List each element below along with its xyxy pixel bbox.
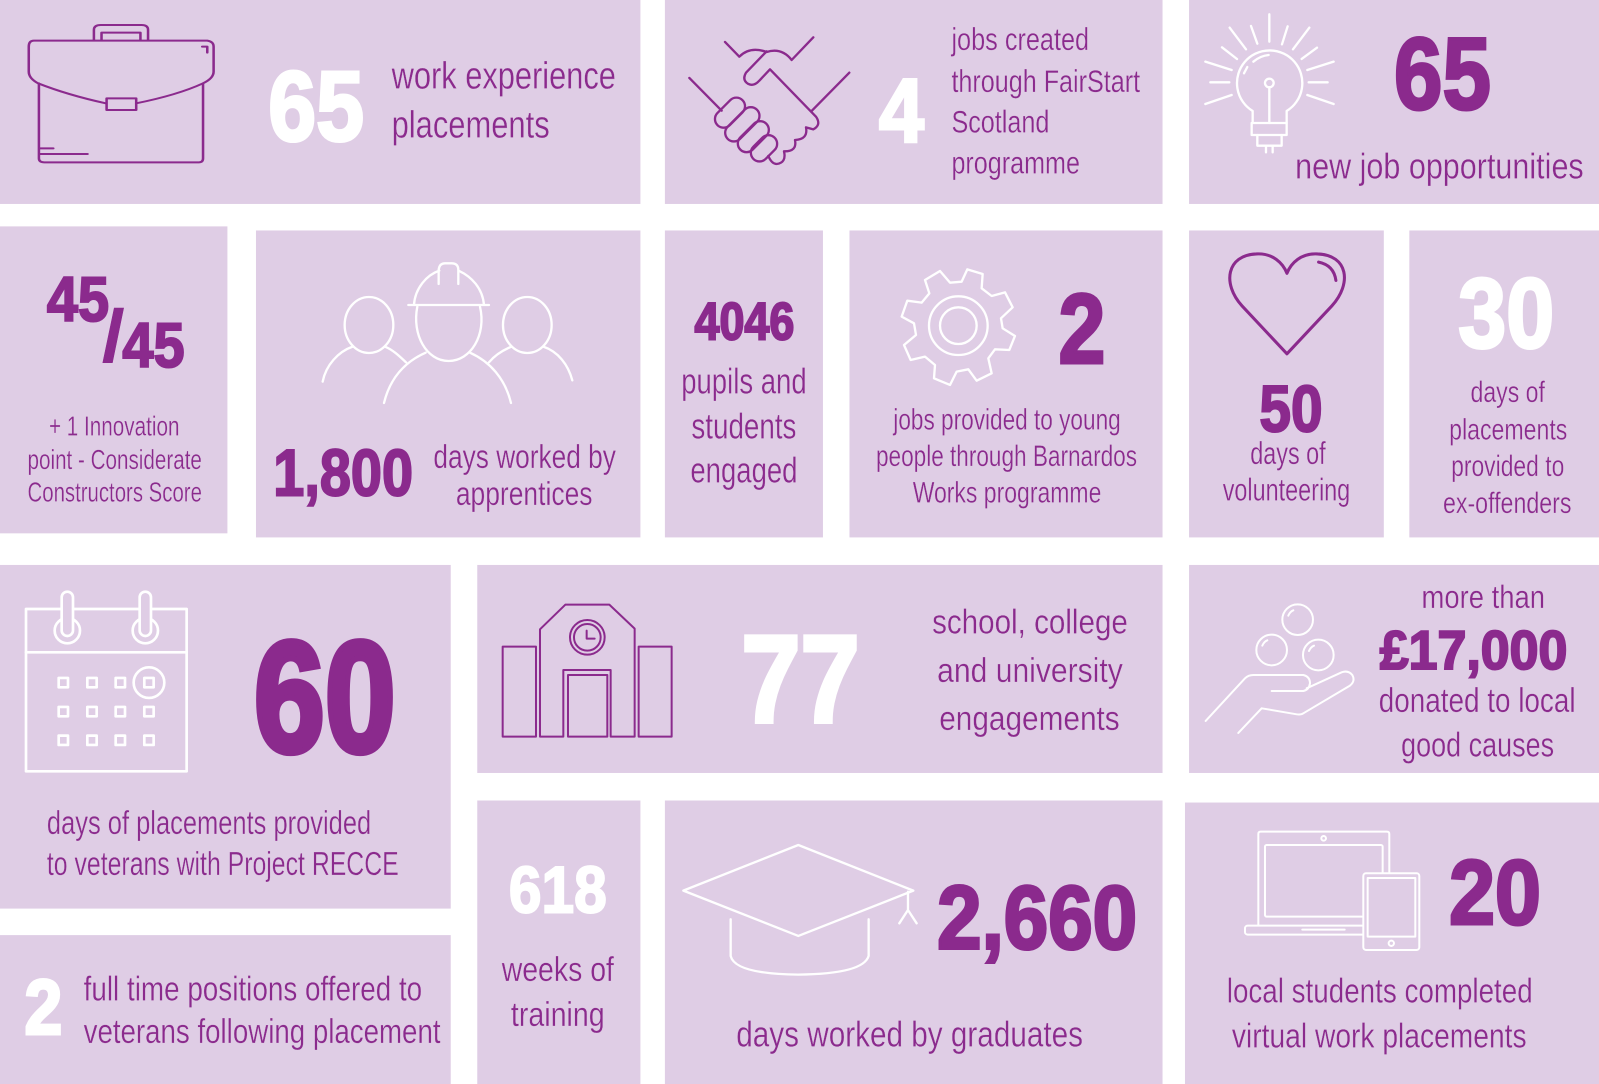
stat: 65: 65 — [1394, 17, 1491, 131]
panel: days of volunteering — [1189, 230, 1384, 537]
panel: days worked by apprentices — [256, 230, 640, 537]
label: work experience placements: work experience — [391, 55, 616, 97]
label: days of volunteering: volunteering — [1223, 472, 1350, 508]
label: full time positions offered to veterans — [84, 970, 441, 1051]
label: jobs created through FairStart Scotland programme: programme — [951, 144, 1080, 180]
label: jobs provided to young people: jobs provided to young — [893, 403, 1121, 436]
label: days worked by apprentices — [433, 439, 616, 513]
label: school, college and university engagements: and university — [937, 652, 1123, 690]
label: innovation point: Constructors Score — [28, 477, 202, 508]
stat: 50: 50 — [1259, 372, 1323, 446]
stat: 618: 618 — [509, 854, 607, 928]
label: innovation point: point - Considerate — [28, 444, 202, 475]
label: jobs created through FairStart Scotland programme: through FairStart — [951, 63, 1140, 99]
label: donated to local good causes: good causes — [1401, 727, 1554, 765]
label: jobs provided to young people — [876, 403, 1137, 510]
stat: 4046: 4046 — [694, 293, 794, 352]
stat: 45/45 — [47, 265, 185, 381]
label: days of placements provided to veterans: to veterans with Project RECCE — [47, 846, 399, 883]
stat: 4: 4 — [879, 62, 924, 162]
label: local students completed virtual work placements — [1227, 972, 1533, 1055]
label: days worked by graduates: days worked by graduates — [736, 1014, 1083, 1054]
panel: full time positions — [0, 935, 451, 1084]
label: local students completed virtual work placements: local students completed — [1227, 972, 1533, 1010]
stat: 2: 2 — [1059, 273, 1105, 384]
label: pupils and students engaged — [681, 362, 807, 490]
stat: 45/45: / — [102, 295, 124, 377]
label: innovation point: + 1 Innovation — [49, 410, 179, 441]
stat: 45/45: 45 — [47, 265, 109, 335]
label: days of placements provided to ex-offenders: days of — [1471, 376, 1546, 409]
icon: graduation cap — [683, 845, 917, 975]
panel: work experience placements — [0, 0, 640, 204]
label: days worked by apprentices: days worked by — [433, 439, 616, 476]
panel: new job opportunities — [1189, 0, 1599, 204]
panel: days worked by graduates — [665, 801, 1163, 1084]
label: more than: more than — [1422, 578, 1545, 615]
panel: pupils and students engaged — [665, 230, 823, 537]
stat: 65: 65 — [268, 51, 364, 162]
stat: £17,000: £17,000 — [1380, 619, 1567, 681]
icon: heart — [1230, 254, 1344, 354]
label: weeks of training: training — [511, 996, 605, 1034]
label: pupils and students engaged: students — [691, 406, 796, 446]
icon: gear — [902, 269, 1015, 385]
label: jobs provided to young people: Works programme — [913, 477, 1101, 510]
panel: Barnardos Works jobs — [849, 230, 1163, 537]
label: innovation point — [28, 410, 202, 508]
panel: weeks of training — [477, 801, 640, 1084]
label: days of volunteering — [1223, 435, 1350, 508]
panel: virtual work placements — [1185, 803, 1599, 1084]
stat: 77: 77 — [741, 610, 860, 749]
label: days of placements provided to ex-offenders — [1443, 376, 1571, 520]
stat: 1,800: 1,800 — [273, 437, 413, 511]
panel: donations — [1189, 565, 1599, 773]
icon: laptop and tablet — [1245, 832, 1419, 950]
stat: 2,660: 2,660 — [937, 868, 1137, 968]
label: school, college and university engagements: engagements — [939, 700, 1120, 738]
panel: school college university engagements — [477, 565, 1163, 773]
label: days worked by apprentices: apprentices — [456, 476, 592, 513]
stat: 30: 30 — [1458, 258, 1554, 369]
label: school, college and university engagements: school, college — [932, 603, 1128, 641]
label: pupils and students engaged: engaged — [690, 450, 797, 490]
stat: 45/45: 45 — [122, 311, 185, 381]
label: work experience placements: placements — [392, 104, 550, 146]
label: jobs provided to young people: people through Barnardos — [876, 440, 1137, 473]
panel: jobs created through FairStart — [665, 0, 1163, 204]
label: donated to local good causes — [1379, 682, 1576, 765]
label: work experience placements — [391, 55, 616, 146]
label: days of placements provided to ex-offenders: placements — [1449, 414, 1567, 447]
panel: placements for ex-offenders — [1409, 230, 1599, 537]
label: days of volunteering: days of — [1250, 435, 1326, 471]
panel: considerate constructors score — [0, 226, 227, 533]
label: weeks of training — [501, 951, 614, 1034]
label: weeks of training: weeks of — [501, 951, 614, 989]
label: jobs created through FairStart Scotland programme: jobs created — [951, 21, 1089, 57]
icon: hand with coins — [1206, 604, 1354, 733]
label: full time positions offered to veterans: veterans following placement — [84, 1013, 441, 1051]
label: days of placements provided to veterans — [47, 805, 399, 883]
icon: school building — [503, 605, 672, 737]
label: days of placements provided to ex-offenders: provided to — [1451, 450, 1564, 483]
icon: handshake — [689, 37, 849, 165]
icon: briefcase — [29, 25, 214, 162]
panel: veterans placements — [0, 565, 451, 909]
icon: light bulb — [1205, 14, 1334, 152]
stat: 60: 60 — [254, 610, 396, 786]
icon: calendar — [26, 592, 187, 771]
label: school, college and university engagements — [932, 603, 1128, 738]
label: jobs created through FairStart Scotland programme: Scotland — [951, 104, 1049, 140]
label: pupils and students engaged: pupils and — [681, 362, 807, 402]
icon: three workers — [323, 263, 572, 403]
label: jobs created through FairStart Scotland programme — [951, 21, 1140, 180]
stat: 20: 20 — [1449, 842, 1541, 944]
label: days of placements provided to veterans: days of placements provided — [47, 805, 371, 842]
stat: 2: 2 — [24, 965, 62, 1051]
label: full time positions offered to veterans: full time positions offered to — [84, 970, 422, 1008]
label: local students completed virtual work placements: virtual work placements — [1232, 1017, 1527, 1055]
